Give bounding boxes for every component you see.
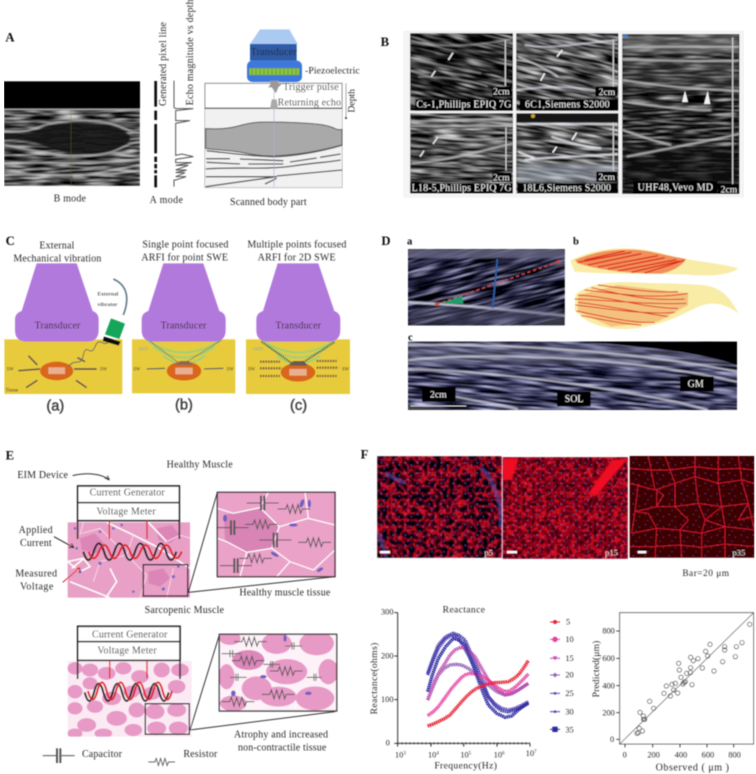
image Cs-1	[410, 32, 514, 112]
x axis numbers: 5	[469, 752, 472, 757]
x axis numbers: 400	[675, 750, 687, 759]
series 15	[428, 648, 528, 700]
x axis numbers: 10	[526, 749, 534, 758]
heading healthy muscle: Healthy Muscle	[167, 460, 233, 471]
label piezoelectric: -Piezoelectric	[305, 65, 360, 76]
caption a: (a)	[46, 398, 64, 414]
series curves	[428, 633, 528, 726]
x axis numbers	[395, 749, 537, 760]
sub-diagram b: SW	[227, 367, 234, 372]
y axis numbers: 400	[602, 681, 615, 690]
sarcopenic waveforms	[85, 682, 172, 701]
heading external vibration: Mechanical vibration	[13, 254, 101, 265]
sub-diagram a	[4, 263, 127, 394]
sub-diagram b: ARFI	[138, 347, 149, 352]
series 35	[428, 638, 528, 717]
heading C: C	[6, 234, 15, 248]
label a: a	[407, 236, 413, 247]
ultrasound image a	[407, 248, 566, 326]
ultrasound image c: 2cm	[430, 390, 447, 401]
chart title: Reactance	[443, 605, 485, 616]
data points	[635, 622, 752, 735]
applied current label: Current	[20, 538, 52, 549]
y axis numbers: 600	[602, 654, 615, 663]
fluorescence image p15: p15	[605, 547, 618, 557]
applied current label: Applied	[19, 525, 53, 536]
panel F: muscle growth data	[361, 448, 754, 579]
healthy selection box	[143, 565, 188, 596]
series 25	[428, 635, 528, 710]
sarcopenic EIM device	[78, 626, 180, 679]
healthy zoom lines	[188, 492, 335, 592]
x axis numbers: 6	[502, 752, 505, 757]
heading D: D	[381, 234, 390, 248]
legend 10: 10	[565, 635, 574, 644]
muscle model lower	[575, 282, 739, 329]
x axis numbers: 4	[436, 752, 439, 757]
series 10	[428, 673, 528, 716]
healthy tissue caption: Healthy muscle tissue	[239, 588, 331, 599]
EIM device label: EIM Device	[17, 470, 69, 481]
sub-diagram c: ARFI	[253, 347, 264, 352]
image Cs-1: 2cm	[493, 87, 510, 98]
panel E: electrical impedance myography	[6, 449, 338, 765]
label c: c	[408, 332, 413, 343]
sub-diagram a: External	[97, 292, 119, 298]
sub-diagram a: Tissue	[5, 389, 19, 394]
y axis numbers: 300	[381, 608, 393, 617]
A mode caption: A mode	[150, 195, 184, 206]
measured voltage label: Voltage	[20, 582, 54, 593]
image 6C1: 6C1,Siemens S2000	[525, 100, 610, 111]
sarcopenic tissue inset	[219, 631, 338, 711]
y axis numbers	[381, 608, 393, 747]
scale bar caption: Bar=20 μm	[682, 569, 730, 579]
heading external vibration	[13, 240, 101, 265]
sub-diagram c: Transducer	[275, 320, 322, 331]
sarcopenic histology	[68, 661, 192, 737]
label trigger pulse: Trigger pulse	[283, 82, 339, 93]
x axis numbers: 10	[428, 751, 436, 760]
y axis numbers: 0	[610, 735, 614, 744]
fluorescence image p15	[503, 457, 628, 559]
B mode image	[4, 81, 140, 186]
x axis numbers: 10	[460, 751, 469, 760]
y axis title: Predicted(μm)	[591, 641, 602, 697]
image Cs-1: Cs-1,Phillips EPIQ 7G	[416, 100, 511, 111]
image UHF48: 2cm	[721, 184, 738, 195]
x axis numbers	[623, 750, 741, 759]
image frame	[404, 31, 743, 197]
panel C: shear wave elastography schematics	[4, 234, 350, 414]
x axis numbers: 0	[623, 750, 627, 759]
measured voltage label	[15, 568, 80, 593]
plot frame and fit line	[616, 613, 754, 747]
healthy EIM device: Voltage Meter	[96, 506, 156, 517]
x axis numbers: 800	[728, 750, 741, 759]
applied current label	[19, 525, 74, 549]
A mode echo trace	[174, 81, 193, 187]
legend 15: 15	[565, 654, 574, 663]
image L18-5: 2cm	[493, 172, 510, 183]
heading multiple points: Multiple points focused	[247, 240, 346, 251]
sub-diagram c: SW	[342, 367, 350, 372]
sarcopenic zoom lines	[190, 635, 335, 730]
image L18-5	[410, 112, 514, 194]
x axis numbers: 3	[403, 752, 406, 757]
fluorescence image p35: p35	[732, 547, 745, 557]
image 18L6: 18L6,Siemens S2000	[522, 183, 611, 194]
reactance line chart	[369, 605, 537, 771]
panel D: muscle architecture	[381, 236, 738, 411]
heading B: B	[381, 35, 390, 49]
x axis numbers: 7	[534, 750, 537, 755]
healthy EIM device: Current Generator	[90, 488, 165, 499]
EIM device label	[17, 470, 109, 481]
sub-diagram b: SW	[133, 367, 141, 372]
heading single point	[141, 240, 228, 264]
fluorescence image p35	[630, 456, 754, 558]
label b: b	[573, 236, 579, 247]
image 18L6: 2cm	[598, 172, 615, 183]
caption c: (c)	[290, 398, 307, 414]
label returning echo: Returning echo	[278, 97, 341, 108]
legend capacitor: Capacitor	[82, 749, 123, 760]
x axis numbers: 10	[395, 751, 403, 760]
healthy tissue inset	[217, 492, 335, 577]
series 5	[428, 661, 528, 726]
y axis numbers: 200	[602, 708, 615, 717]
healthy muscle histology	[68, 522, 190, 598]
ultrasound image c: SOL	[565, 394, 584, 405]
sarcopenic tissue caption: non-contractile tissue	[238, 743, 327, 754]
y axis numbers: 800	[602, 627, 615, 636]
image L18-5: L18-5,Phillips EPIQ 7G	[412, 183, 512, 194]
y axis title: Reactance(ohms)	[369, 643, 380, 714]
heading single point: Single point focused	[142, 240, 228, 251]
x axis title: Observed ( μm )	[656, 763, 729, 774]
A mode pixel line	[152, 81, 160, 187]
sarcopenic selection box	[145, 704, 189, 734]
sarcopenic EIM device: Voltage Meter	[97, 645, 157, 656]
x axis numbers: 200	[647, 750, 660, 759]
fluorescence image p5: p5	[484, 547, 493, 557]
heading multiple points: ARFI for 2D SWE	[258, 253, 336, 264]
series 20	[428, 664, 528, 700]
sarcopenic tissue caption	[234, 730, 328, 754]
legend 25: 25	[565, 689, 574, 698]
sub-diagram a: SW	[7, 367, 14, 372]
series 30	[428, 633, 528, 712]
transducer	[247, 29, 302, 109]
heading external vibration: External	[39, 240, 75, 251]
image UHF48: UHF48,Vevo MD	[638, 182, 713, 193]
heading multiple points	[247, 240, 346, 264]
transducer: Transducer	[251, 47, 297, 58]
heading F: F	[361, 448, 369, 462]
chart axes	[394, 613, 530, 747]
healthy EIM device	[78, 486, 179, 539]
B mode caption: B mode	[54, 194, 87, 205]
legend 30: 30	[565, 707, 574, 716]
measured voltage label: Measured	[15, 568, 57, 579]
legend resistor	[148, 749, 218, 765]
legend 20: 20	[565, 671, 574, 680]
scanned body part diagram	[205, 83, 342, 187]
sub-diagram a: Transducer	[35, 320, 81, 331]
panel B: transducer comparison images	[380, 31, 744, 198]
image 6C1: 2cm	[599, 87, 616, 98]
y axis numbers: 0	[386, 738, 390, 747]
x axis title: Frequency(Hz)	[434, 760, 497, 771]
caption b: (b)	[175, 397, 193, 413]
sub-diagram c: SW	[248, 367, 256, 372]
image UHF48	[622, 33, 740, 195]
sarcopenic EIM device: Current Generator	[92, 629, 168, 640]
sub-diagram b	[132, 263, 235, 393]
image 18L6	[516, 112, 620, 194]
x axis numbers: 600	[702, 750, 714, 759]
rotated label: generated pixel line: Generated pixel line	[158, 21, 169, 106]
chart legend	[550, 618, 574, 735]
y axis numbers	[602, 627, 615, 744]
ultrasound image c	[407, 340, 738, 411]
depth marker: Depth	[347, 89, 358, 113]
x axis numbers: 10	[494, 751, 502, 760]
scatter plot	[591, 613, 754, 774]
panel A: ultrasound principle	[4, 0, 360, 208]
sarcopenic tissue caption: Atrophy and increased	[234, 730, 328, 741]
legend resistor: Resistor	[183, 749, 218, 760]
sub-diagram a: SW	[100, 367, 108, 372]
rotated label: echo magnitude: Echo magnitude vs depth	[185, 0, 196, 105]
heading single point: ARFI for point SWE	[141, 253, 228, 264]
healthy waveforms	[83, 543, 182, 560]
sub-diagram c	[246, 263, 350, 394]
depth marker	[345, 83, 358, 119]
legend 35: 35	[565, 726, 574, 735]
muscle model upper	[570, 248, 738, 276]
sub-diagram a: vibrator	[97, 302, 118, 308]
fluorescence image p5	[377, 456, 502, 558]
sub-diagram b: Transducer	[161, 320, 207, 331]
scanned body part caption: Scanned body part	[230, 197, 307, 208]
heading A: A	[5, 30, 15, 44]
legend 5: 5	[566, 618, 570, 627]
ultrasound image c: GM	[688, 379, 704, 390]
image 6C1	[516, 32, 620, 112]
legend capacitor	[43, 748, 123, 763]
y axis numbers: 100	[381, 695, 393, 704]
y axis numbers: 200	[381, 652, 393, 661]
heading sarcopenic muscle: Sarcopenic Muscle	[145, 605, 225, 616]
heading E: E	[6, 449, 14, 463]
